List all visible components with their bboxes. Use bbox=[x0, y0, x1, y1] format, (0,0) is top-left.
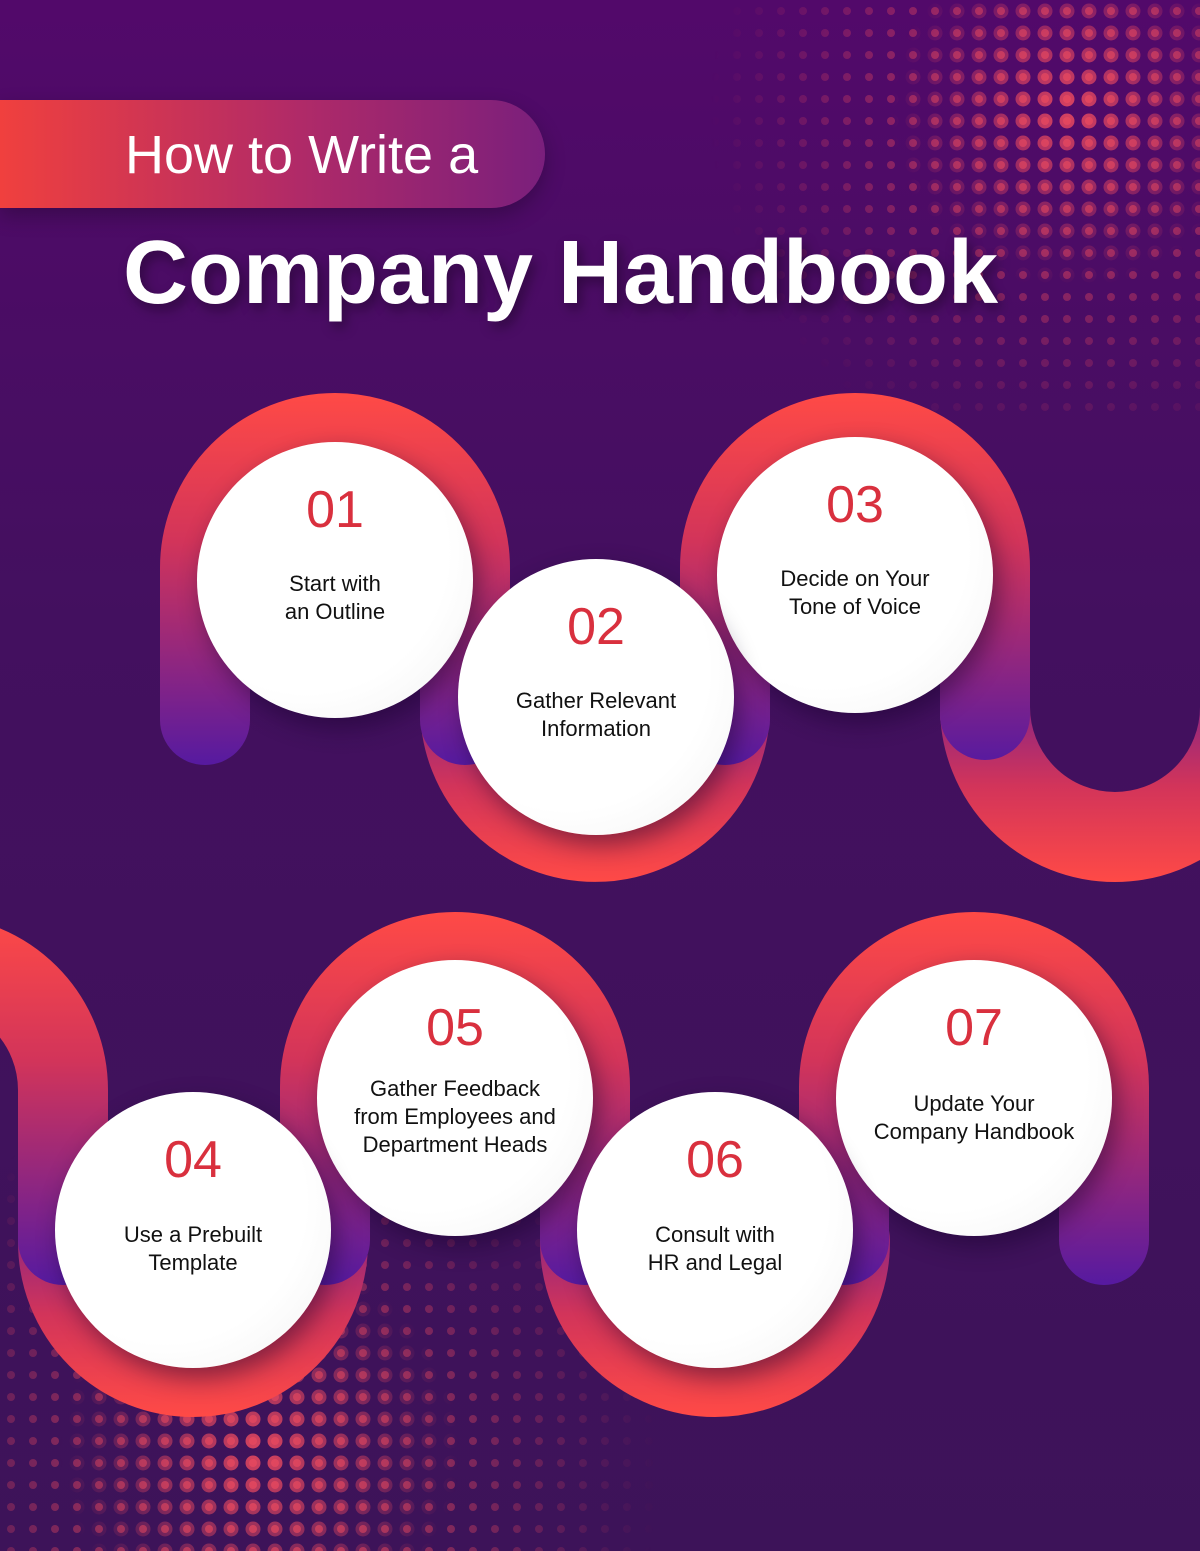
step 01: Start with bbox=[289, 571, 381, 596]
step 05: Gather Feedback bbox=[370, 1076, 540, 1101]
step 07: Update Your bbox=[913, 1091, 1035, 1116]
step 04: 04 bbox=[164, 1131, 222, 1189]
step 07 bbox=[836, 960, 1112, 1236]
step 06: HR and Legal bbox=[648, 1250, 782, 1275]
step 06: 06 bbox=[686, 1131, 744, 1189]
step 03: 03 bbox=[826, 476, 884, 534]
step 02: Information bbox=[541, 716, 651, 741]
step 07: 07 bbox=[945, 999, 1003, 1057]
step 02 bbox=[458, 559, 734, 835]
step 05: 05 bbox=[426, 999, 484, 1057]
step 05 bbox=[317, 960, 593, 1236]
title pill: How to Write a: How to Write a bbox=[125, 125, 478, 185]
title: Company Handbook: Company Handbook bbox=[123, 223, 998, 323]
step 05: Department Heads bbox=[363, 1132, 547, 1157]
step 04: Template bbox=[148, 1250, 238, 1275]
step 01: an Outline bbox=[285, 599, 385, 624]
step 06 bbox=[577, 1092, 853, 1368]
step 07: Company Handbook bbox=[874, 1119, 1074, 1144]
step 04 bbox=[55, 1092, 331, 1368]
step 03: Decide on Your bbox=[780, 566, 930, 591]
step 06: Consult with bbox=[655, 1222, 775, 1247]
step 04: Use a Prebuilt bbox=[124, 1222, 262, 1247]
step 03: Tone of Voice bbox=[789, 594, 921, 619]
step 01: 01 bbox=[306, 481, 364, 539]
step 05: from Employees and bbox=[354, 1104, 556, 1129]
step 02: 02 bbox=[567, 598, 625, 656]
step 02: Gather Relevant bbox=[516, 688, 676, 713]
title pill: How to Write a bbox=[0, 100, 545, 208]
step 03 bbox=[717, 437, 993, 713]
step 01 bbox=[197, 442, 473, 718]
